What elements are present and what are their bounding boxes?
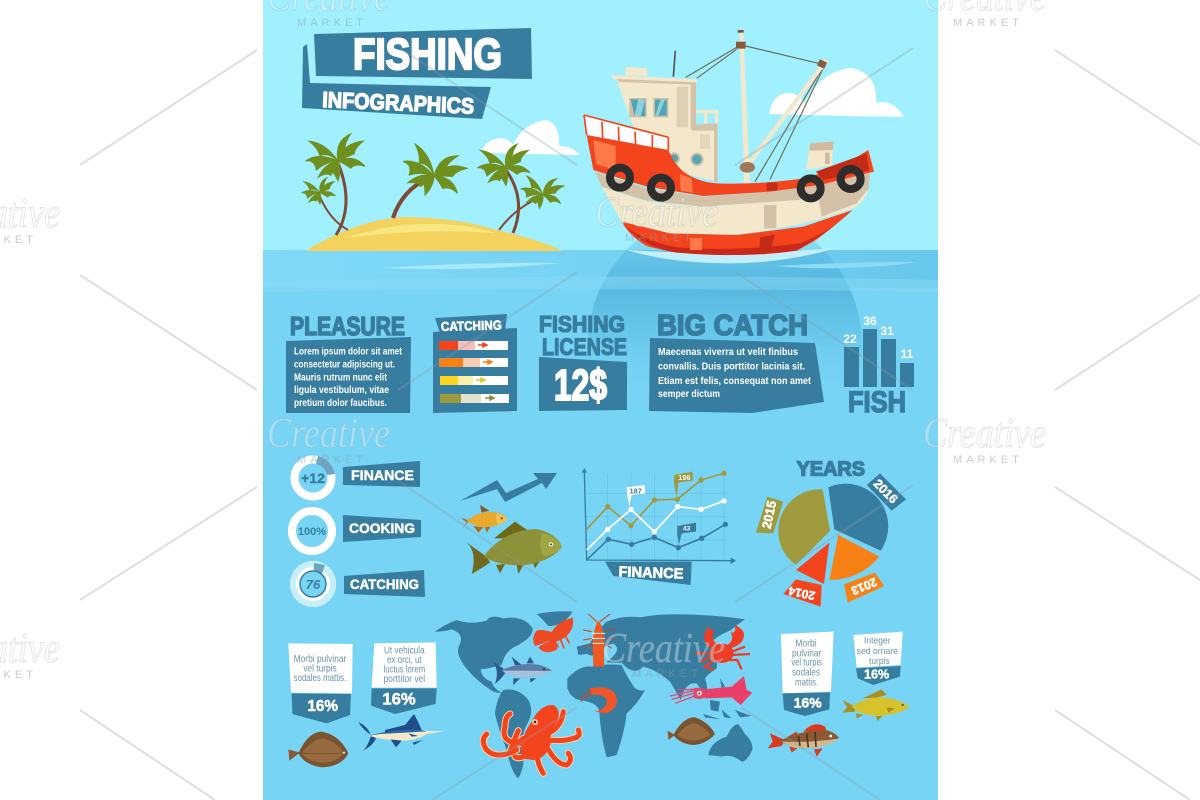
card: morbi right: mattis.	[795, 677, 818, 688]
island with palm trees	[301, 134, 567, 251]
arrow: growth	[460, 473, 557, 502]
card: vehicula: 16%	[382, 690, 416, 709]
card: integer: Integer	[864, 636, 891, 646]
pie chart: years: YEARS	[797, 457, 865, 480]
heading: fishing license: LICENSE	[542, 334, 627, 361]
sky background panel	[263, 0, 938, 800]
watermark: creative market: Creative	[602, 626, 725, 672]
icon: lobster	[533, 617, 573, 652]
label: finance	[343, 461, 420, 487]
label: catching	[344, 570, 425, 597]
pie chart: years	[756, 457, 906, 607]
pie chart: years: 2015	[760, 500, 779, 530]
card: morbi right	[781, 632, 834, 716]
pie chart: years: 2016	[871, 477, 900, 506]
card: integer: sed ornare	[857, 646, 898, 656]
cloud right	[769, 68, 904, 117]
card: morbi right: vel turpis	[791, 658, 822, 669]
card: vehicula: ex orci, ut	[387, 655, 422, 666]
icon: carp fish	[467, 522, 562, 574]
label: catching: CATCHING	[350, 576, 419, 592]
watermark: creative market: MARKET	[297, 454, 363, 466]
progress ring: +12 finance: +12	[301, 470, 325, 486]
card: morbi right: sodales	[792, 667, 820, 678]
line chart: finance	[582, 468, 736, 585]
panel: pleasure text	[286, 337, 411, 413]
icon: squid	[670, 676, 752, 705]
line chart: finance: FINANCE	[618, 564, 684, 583]
card: morbi left: Morbi pulvinar	[294, 654, 347, 665]
card: morbi left: sodales mattis.	[294, 673, 346, 684]
icon: yellow fish	[842, 689, 909, 721]
bar chart: fish: 22	[843, 332, 857, 346]
panel: big catch text: Maecenas viverra ut velit finibus	[658, 347, 798, 358]
cloud left	[481, 120, 580, 155]
progress ring: 100% cooking	[292, 511, 332, 551]
progress ring: 100% cooking: 100%	[298, 526, 326, 538]
card: morbi right: pulvinar	[792, 648, 822, 659]
card: vehicula: luctus lorem	[383, 664, 425, 675]
icon: golden fish	[461, 505, 507, 533]
watermark: creative market: MARKET	[625, 232, 691, 244]
line chart: finance: 196	[678, 473, 690, 482]
card: morbi right: Morbi	[795, 638, 817, 649]
heading: fishing license	[539, 311, 627, 361]
fishing boat	[584, 30, 874, 263]
bar chart: fish	[843, 314, 914, 419]
bar chart: fish: 36	[863, 314, 877, 328]
panel: license price: 12$	[554, 361, 607, 410]
line chart: finance: 187	[630, 487, 642, 496]
watermark: creative market: Creative	[923, 411, 1046, 457]
watermark: creative market: MARKET	[297, 17, 363, 29]
panel: big catch text	[649, 338, 824, 413]
label: cooking	[343, 515, 421, 542]
card: integer: turpis	[869, 656, 890, 666]
card: vehicula: Ut vehicula	[384, 646, 425, 657]
watermark: creative market: MARKET	[953, 454, 1019, 466]
pie chart: years: 2013	[849, 575, 879, 598]
card: integer: 16%	[864, 668, 889, 682]
bar chart: fish: FISH	[848, 386, 906, 419]
title banner: INFOGRAPHICS	[322, 87, 475, 119]
card: vehicula	[371, 642, 437, 714]
pie chart: years: 2014	[787, 584, 816, 603]
card: integer	[853, 632, 903, 685]
bar chart: fish: 11	[901, 347, 914, 361]
icon: crab	[695, 624, 750, 670]
card: morbi right: 16%	[794, 694, 822, 710]
panel: pleasure text: pretium dolor faucibus.	[294, 398, 387, 409]
card: morbi left	[288, 643, 353, 723]
icon: flatfish left	[288, 732, 348, 767]
panel: pleasure text: Mauris rutrum nunc elit	[294, 372, 388, 384]
watermark: creative market: Creative	[595, 190, 718, 236]
panel: pleasure text: consectetur adipiscing ut.	[294, 360, 395, 370]
heading: fishing license: FISHING	[539, 311, 625, 337]
progress ring: 76 catching: 76	[306, 577, 321, 592]
watermark: creative market	[0, 0, 1046, 681]
sea background	[263, 208, 938, 800]
label: finance: FINANCE	[351, 467, 414, 483]
line chart: finance: 43	[683, 526, 691, 533]
icon: tuna	[491, 657, 552, 685]
watermark: creative market: MARKET	[632, 668, 698, 680]
panel: pleasure text: Lorem ipsum dolor sit amet	[294, 346, 403, 358]
panel: big catch text: semper dictum	[658, 389, 720, 400]
panel: pleasure text: ligula vestibulum, vitae	[294, 385, 389, 396]
card: morbi left: vel turpis	[303, 663, 337, 674]
panel: catching bars: CATCHING	[441, 317, 502, 334]
label: cooking: COOKING	[349, 520, 415, 536]
panel: catching bars	[433, 314, 517, 413]
icon: octopus	[483, 705, 579, 773]
watermark: creative market: MARKET	[953, 17, 1019, 29]
bar chart: fish: 31	[880, 324, 894, 338]
icon: marlin	[358, 714, 445, 751]
title banner: FISHING	[353, 30, 502, 79]
progress ring: 76 catching	[290, 561, 336, 607]
panel: big catch text: Etiam est felis, consequat non amet	[658, 376, 812, 387]
world map	[435, 611, 752, 778]
card: vehicula: porttitor vel	[383, 674, 425, 685]
icon: shrimp	[580, 687, 617, 713]
icon: perch	[768, 724, 839, 757]
heading: big catch: BIG CATCH	[657, 310, 808, 342]
icon: spiny lobster	[583, 614, 615, 667]
title banner	[302, 28, 532, 119]
panel: big catch text: convallis. Duis porttitor lacinia sit.	[658, 362, 805, 372]
card: morbi left: 16%	[307, 698, 338, 715]
watermark: creative market: Creative	[267, 411, 390, 457]
heading: pleasure: PLEASURE	[290, 311, 405, 341]
icon: flatfish right	[668, 717, 715, 745]
progress ring: +12 finance	[294, 456, 335, 496]
